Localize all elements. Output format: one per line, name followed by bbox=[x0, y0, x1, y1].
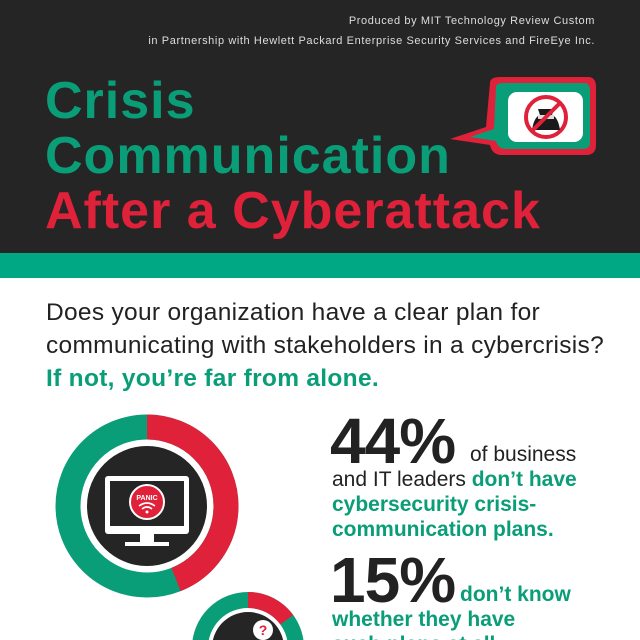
credits: in Partnership with Hewlett Packard Enterprise Security Services and FireEye Inc. bbox=[148, 35, 595, 47]
title: Communication bbox=[45, 127, 451, 185]
stat: 44%: and IT leaders don’t have bbox=[332, 468, 577, 491]
stat: 44%: 44% bbox=[330, 405, 455, 477]
chart: donut 15% bbox=[192, 592, 304, 640]
stat: 44% bbox=[330, 405, 577, 541]
question: If not, you’re far from alone. bbox=[46, 365, 379, 392]
question: communicating with stakeholders in a cybercrisis? bbox=[46, 332, 604, 359]
title: After a Cyberattack bbox=[45, 182, 541, 240]
icon: monitor panic bbox=[105, 476, 189, 546]
stat: 15%: whether they have bbox=[332, 608, 515, 631]
chart: donut 15%: ? bbox=[259, 622, 267, 638]
icon: speech bubble with spy bbox=[450, 77, 596, 155]
title: Crisis bbox=[45, 72, 196, 130]
stat: 15% bbox=[330, 548, 571, 640]
stat: 44%: cybersecurity crisis- bbox=[332, 493, 536, 516]
stat: 44%: communication plans. bbox=[332, 518, 554, 541]
stat: 44%: of business bbox=[470, 443, 576, 466]
header panel bbox=[0, 0, 640, 253]
credits bbox=[148, 15, 595, 47]
stat: 15%: don’t know bbox=[460, 583, 571, 606]
title bbox=[45, 72, 541, 240]
question: Does your organization have a clear plan for bbox=[46, 299, 540, 326]
icon: monitor panic: PANIC bbox=[136, 495, 158, 502]
question bbox=[46, 299, 604, 392]
teal band bbox=[0, 253, 640, 278]
chart: donut 44% bbox=[56, 414, 238, 598]
credits: Produced by MIT Technology Review Custom bbox=[349, 15, 595, 27]
